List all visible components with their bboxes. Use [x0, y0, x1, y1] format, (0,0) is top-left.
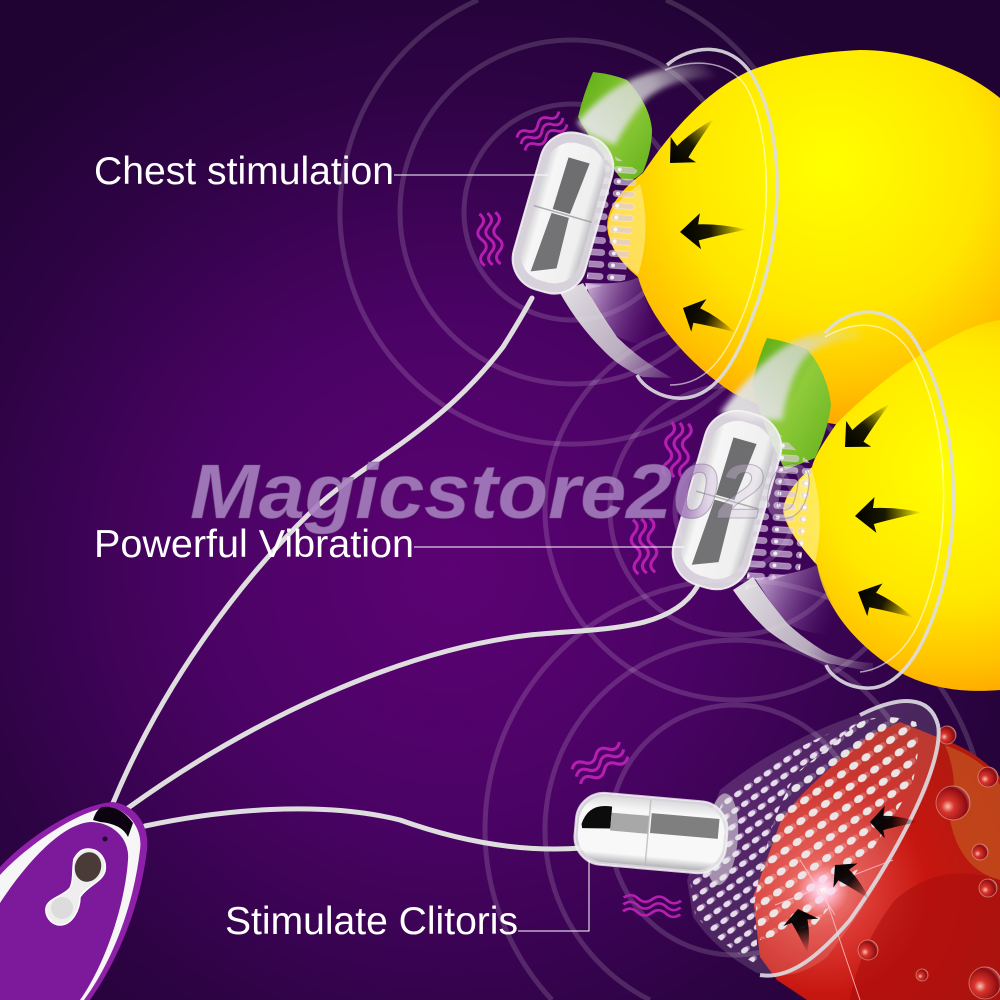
- orange highlight patch: [945, 745, 1000, 880]
- leader line: [394, 174, 548, 176]
- watermark: Magicstore2020: [190, 449, 810, 535]
- vibration squiggles: [476, 109, 692, 917]
- squiggle: [623, 895, 681, 917]
- lemon tip highlight: [784, 470, 820, 563]
- seam: [696, 491, 758, 509]
- fruit body: [753, 722, 1000, 1000]
- arrow: [780, 905, 825, 956]
- silver body: [674, 414, 780, 586]
- seam: [534, 206, 592, 222]
- white band: [0, 807, 140, 1000]
- bottom band: [560, 283, 672, 378]
- lemon tip highlight: [608, 184, 646, 275]
- water drops: [858, 726, 1000, 999]
- cable to lower bullet: [145, 809, 582, 849]
- cable to top bullet: [113, 298, 532, 803]
- sparkle: [775, 860, 893, 1000]
- inner rods: [745, 425, 812, 590]
- arrow: [679, 212, 748, 250]
- remote shell: [0, 802, 147, 1000]
- transparent sleeve: [505, 125, 621, 301]
- neck flare: [702, 792, 742, 886]
- rim inner: [825, 325, 944, 672]
- purple face: [0, 822, 128, 1000]
- lower suction dome: [687, 700, 940, 1000]
- grey band: [610, 813, 649, 834]
- upper suction cup: [560, 49, 777, 398]
- arrow: [823, 853, 881, 911]
- strawberry: [753, 722, 1000, 1000]
- silver body: [515, 136, 611, 290]
- lower suction cup: [720, 312, 953, 688]
- white nubs: [755, 717, 918, 940]
- cables: [113, 298, 697, 849]
- arrow: [832, 391, 902, 460]
- squiggle: [662, 422, 692, 478]
- label text: Powerful Vibration: [94, 523, 414, 566]
- silver body: [575, 794, 727, 872]
- black tip highlight: [581, 804, 612, 831]
- dark stripe top: [716, 437, 757, 502]
- lemon body: [783, 320, 1000, 691]
- dark shade patch: [850, 873, 1000, 1000]
- top band: [577, 63, 717, 145]
- lower bullet: [571, 781, 742, 886]
- upper lemon: [607, 50, 1000, 425]
- label text: Chest stimulation: [94, 150, 394, 193]
- middle bullet: [665, 403, 789, 597]
- arrow: [850, 576, 921, 634]
- remote control: [0, 802, 147, 1000]
- arrow: [870, 806, 918, 838]
- sleeve seam: [645, 800, 651, 866]
- lower lemon: [783, 320, 1000, 691]
- cable to middle bullet: [128, 587, 697, 808]
- arrow: [854, 495, 923, 534]
- indicator dot: [102, 836, 108, 842]
- power button: [51, 897, 73, 919]
- purple nubs: [690, 722, 860, 965]
- display window: [71, 848, 105, 886]
- rim outer: [637, 49, 777, 398]
- concentric vibration rings: [340, 0, 985, 1000]
- upper leaf: [578, 72, 652, 181]
- black highlight: [93, 807, 133, 837]
- transparent sleeve: [572, 791, 730, 876]
- squiggle: [629, 518, 659, 574]
- button plate: [46, 849, 105, 925]
- inner purple shade: [755, 565, 848, 634]
- leader line: [414, 546, 684, 548]
- rim outer: [825, 312, 953, 688]
- inner purple shade: [585, 277, 665, 344]
- dark stripe bottom: [531, 212, 571, 278]
- rim inner: [665, 63, 766, 385]
- lemon body: [607, 50, 1000, 425]
- dark stripe top: [553, 157, 590, 215]
- lower leaf: [752, 338, 831, 470]
- rim: [760, 701, 939, 976]
- dome: [687, 700, 940, 975]
- top band: [720, 327, 864, 420]
- inward arrows: [657, 106, 923, 956]
- label text: Stimulate Clitoris: [225, 900, 518, 943]
- leader line: [518, 860, 589, 931]
- label: stimulate clitoris: [225, 860, 589, 943]
- dark stripe bottom: [692, 498, 735, 572]
- arrow: [657, 106, 727, 176]
- bottom band: [733, 577, 873, 672]
- inner rods: [585, 150, 640, 290]
- dark band: [650, 813, 719, 839]
- upper bullet: [505, 125, 621, 301]
- arrow: [675, 292, 742, 348]
- squiggle: [515, 109, 569, 153]
- squiggle: [570, 739, 630, 787]
- squiggle: [476, 212, 504, 266]
- transparent sleeve: [665, 403, 789, 597]
